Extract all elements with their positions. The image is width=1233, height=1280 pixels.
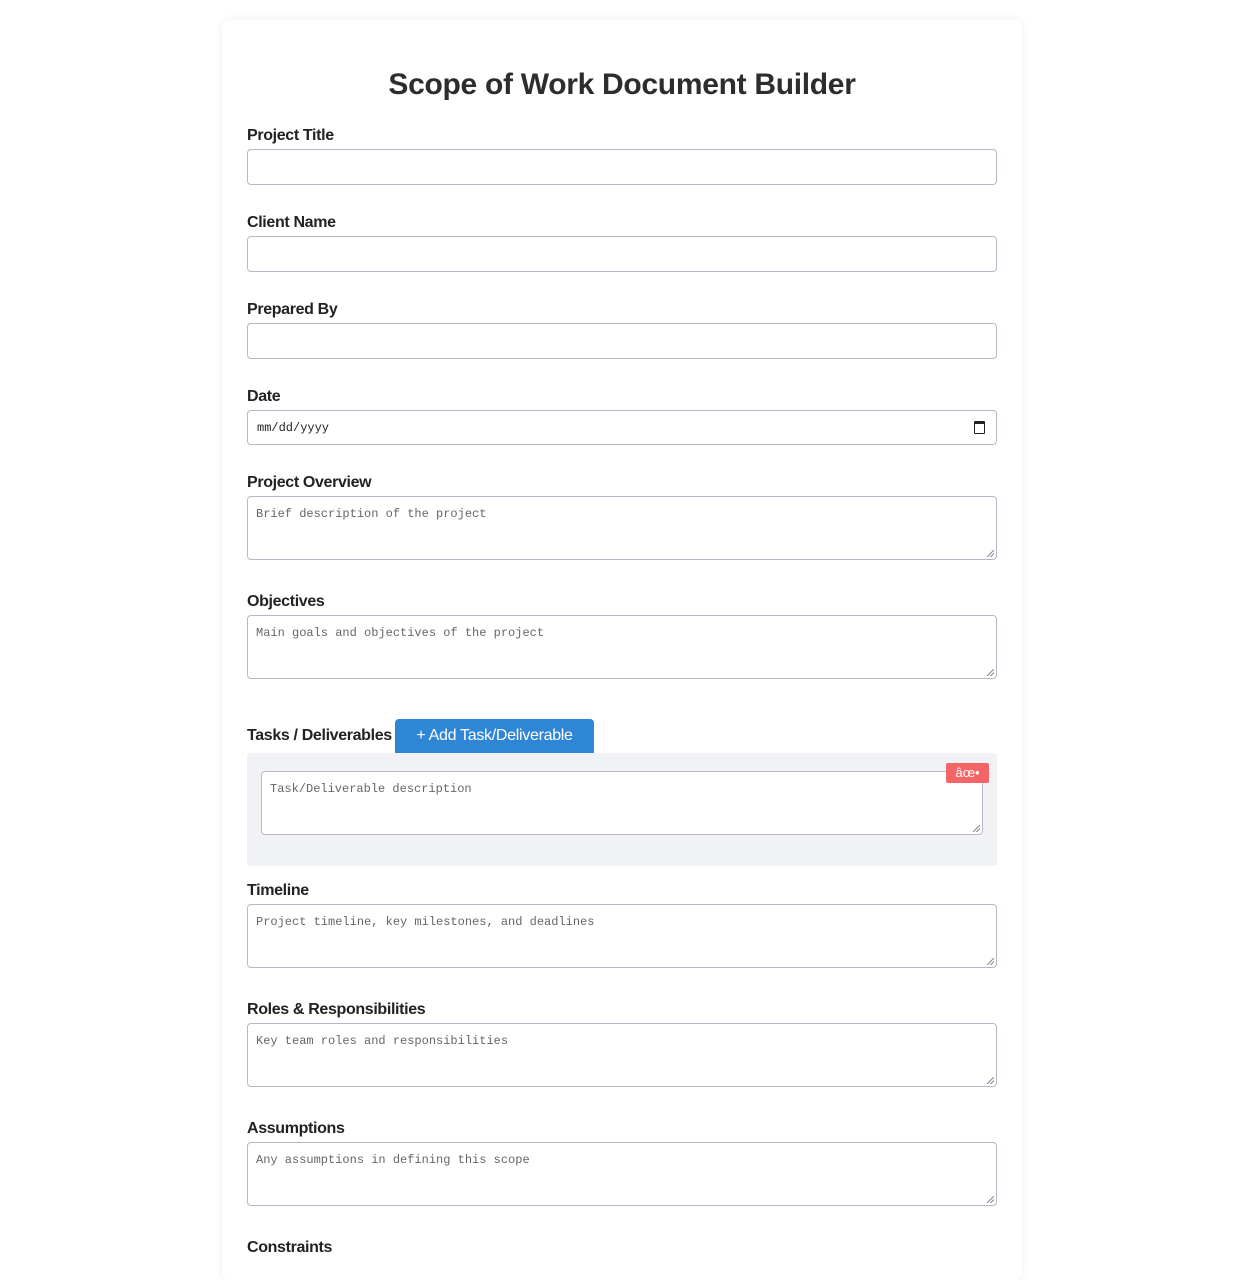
input: date: [247, 410, 997, 445]
label: roles: Roles & Responsibilities: [247, 1001, 425, 1018]
textarea: assumptions: [247, 1142, 997, 1206]
label: timeline: Timeline: [247, 882, 309, 899]
textarea: project overview: [247, 496, 997, 560]
textarea: roles: [247, 1023, 997, 1087]
textarea: task: [261, 771, 983, 835]
textarea: timeline: [247, 904, 997, 968]
textarea: timeline: Project timeline, key milestones, and deadlines: [256, 915, 594, 929]
button: add task: [395, 719, 594, 753]
label: date: Date: [247, 388, 280, 405]
title: Scope of Work Document Builder: [388, 68, 856, 101]
button: add task: + Add Task/Deliverable: [416, 727, 573, 744]
textarea: roles: Key team roles and responsibilities: [256, 1034, 508, 1048]
label: client name: Client Name: [247, 214, 336, 231]
label: tasks: Tasks / Deliverables: [247, 727, 392, 744]
label: assumptions: Assumptions: [247, 1120, 344, 1137]
textarea: objectives: Main goals and objectives of the project: [256, 626, 544, 640]
textarea: assumptions: Any assumptions in defining this scope: [256, 1153, 530, 1167]
input: prepared by: [247, 323, 997, 359]
panel: task list: [247, 753, 997, 866]
label: constraints: Constraints: [247, 1239, 332, 1256]
button: delete: âœ•: [955, 765, 980, 780]
textarea: task: Task/Deliverable description: [270, 782, 472, 796]
textarea: objectives: [247, 615, 997, 679]
textarea: project overview: Brief description of the project: [256, 507, 486, 521]
label: project overview: Project Overview: [247, 474, 371, 491]
label: objectives: Objectives: [247, 593, 324, 610]
label: project title: Project Title: [247, 127, 334, 144]
button: delete: [946, 763, 989, 783]
label: prepared by: Prepared By: [247, 301, 337, 318]
card: [222, 20, 1022, 1280]
input: date: mm/dd/yyyy: [257, 421, 329, 435]
input: project title: [247, 149, 997, 185]
input: client name: [247, 236, 997, 272]
